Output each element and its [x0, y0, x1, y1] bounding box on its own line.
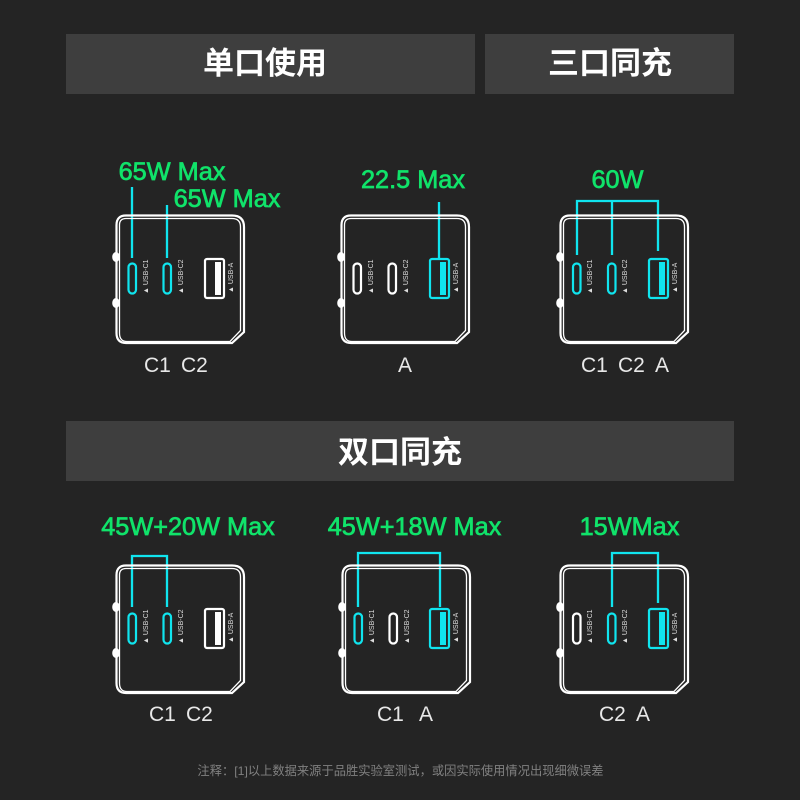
charger: ▲ USB-C2 — [622, 609, 629, 644]
charger: ▲ USB-A — [228, 612, 235, 643]
caption: C2 — [599, 703, 626, 726]
panel: A single port — [337, 166, 469, 377]
charger: ▲ USB-C2 — [404, 609, 411, 644]
charger: ▲ USB-C1 — [143, 609, 150, 644]
panel: C1 C2 single port — [112, 158, 281, 377]
caption: C2 — [181, 354, 208, 377]
label: 65W Max C2: 65W Max — [174, 185, 281, 213]
label: 60W: 60W — [591, 166, 644, 194]
charger: ▲ USB-C1 — [587, 609, 594, 644]
charger: ▲ USB-C2 — [622, 259, 629, 294]
label: 22.5 Max: 22.5 Max — [361, 166, 465, 194]
caption: A — [636, 703, 650, 726]
label: 45W+18W Max: 45W+18W Max — [328, 513, 502, 541]
caption: A — [419, 703, 433, 726]
panel: C1 C2 dual — [101, 513, 275, 726]
charger — [112, 216, 244, 343]
connector lines — [612, 553, 658, 607]
caption: C2 — [618, 354, 645, 377]
charger: ▲ USB-A — [453, 262, 460, 293]
charger: ▲ USB-A — [453, 612, 460, 643]
label: 45W+20W Max: 45W+20W Max — [101, 513, 275, 541]
heading: single port use — [66, 34, 475, 94]
charger — [556, 216, 688, 343]
footnote: 注释：[1]以上数据来源于品胜实验室测试，或因实际使用情况出现细微误差 — [197, 763, 604, 778]
panel: C1 A dual — [328, 513, 502, 726]
heading: three port charging — [485, 34, 734, 94]
charger — [338, 566, 470, 693]
charger: ▲ USB-A — [672, 262, 679, 293]
caption: A — [655, 354, 669, 377]
caption: C1 — [149, 703, 176, 726]
charger: ▲ USB-C2 — [178, 609, 185, 644]
charger: ▲ USB-C2 — [403, 259, 410, 294]
charger: ▲ USB-C2 — [178, 259, 185, 294]
caption: A — [398, 354, 412, 377]
connector line — [438, 202, 440, 258]
panel: C2 A dual — [556, 513, 688, 726]
charger: ▲ USB-C1 — [143, 259, 150, 294]
label: 15WMax: 15WMax — [580, 513, 680, 541]
caption: C1 — [144, 354, 171, 377]
caption: C1 — [581, 354, 608, 377]
caption: C2 — [186, 703, 213, 726]
connector lines — [132, 556, 167, 607]
panel: three port — [556, 166, 688, 377]
connector lines — [358, 553, 440, 607]
charger — [112, 566, 244, 693]
charger: ▲ USB-C1 — [587, 259, 594, 294]
charger: ▲ USB-A — [228, 262, 235, 293]
charger: ▲ USB-C1 — [369, 609, 376, 644]
heading: single port use: 单口使用 — [203, 46, 327, 81]
charger — [337, 216, 469, 343]
connector lines — [132, 187, 167, 258]
heading: three port charging: 三口同充 — [548, 46, 672, 81]
heading: dual port charging: 双口同充 — [338, 435, 462, 470]
connector lines — [577, 201, 658, 255]
charger — [556, 566, 688, 693]
charger: ▲ USB-A — [672, 612, 679, 643]
caption: C1 — [377, 703, 404, 726]
heading: dual port charging — [66, 421, 734, 481]
charger: ▲ USB-C1 — [368, 259, 375, 294]
label: 65W Max C1: 65W Max — [119, 158, 226, 186]
